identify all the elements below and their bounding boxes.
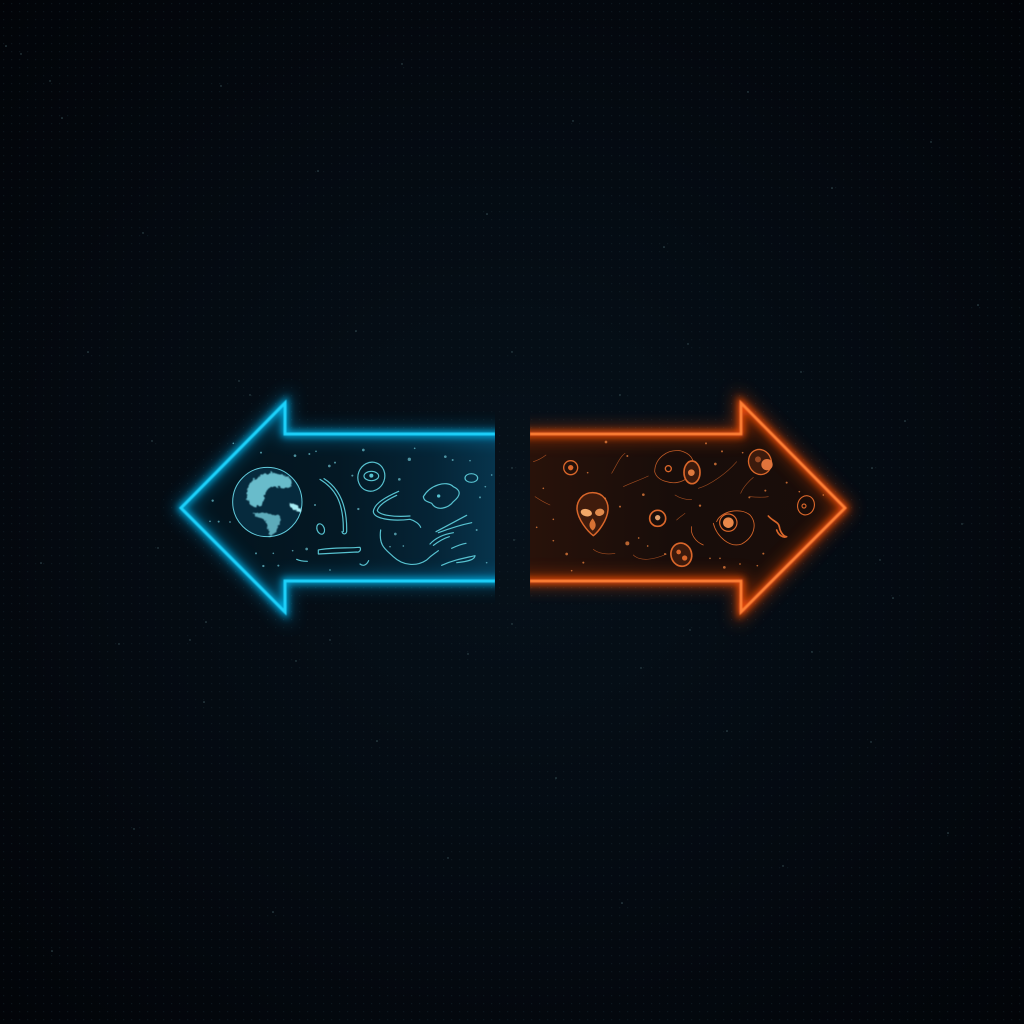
icon: cell top right xyxy=(748,448,773,476)
icon: small cell top left xyxy=(564,461,578,475)
blue arrow neon line xyxy=(181,403,495,612)
icon: large spiral cell xyxy=(691,511,754,545)
orange arrow outer glow xyxy=(505,403,845,612)
icon: oval cell bottom xyxy=(670,542,693,568)
blue arrow body xyxy=(195,422,495,594)
icon: large double cell xyxy=(655,451,700,484)
blue arrow outer glow xyxy=(181,403,520,612)
blue arrow inner glow xyxy=(181,403,520,612)
icon: ring cell center xyxy=(650,510,666,526)
orange filaments xyxy=(533,453,768,559)
orange arrow inner glow xyxy=(505,403,845,612)
blue speckles xyxy=(209,442,492,571)
icon: cell right xyxy=(797,495,815,516)
icon: alien head xyxy=(577,493,608,536)
blue arrow contents xyxy=(209,442,492,571)
icon: small creature xyxy=(768,516,787,537)
orange arrow neon line xyxy=(530,403,845,612)
orange arrow body xyxy=(530,417,838,598)
continents xyxy=(247,473,301,537)
icon: round cell xyxy=(357,462,386,492)
right arrow: orange neon xyxy=(505,403,845,612)
icon: irregular cell xyxy=(423,474,478,508)
icon: rod microbes xyxy=(297,515,475,565)
left arrow: blue neon xyxy=(181,403,520,612)
orange speckles xyxy=(536,441,824,571)
icon: curved worm xyxy=(320,479,347,534)
icon: bent worm xyxy=(373,491,421,527)
icon: earth globe xyxy=(233,467,302,537)
orange arrow contents xyxy=(533,441,824,571)
